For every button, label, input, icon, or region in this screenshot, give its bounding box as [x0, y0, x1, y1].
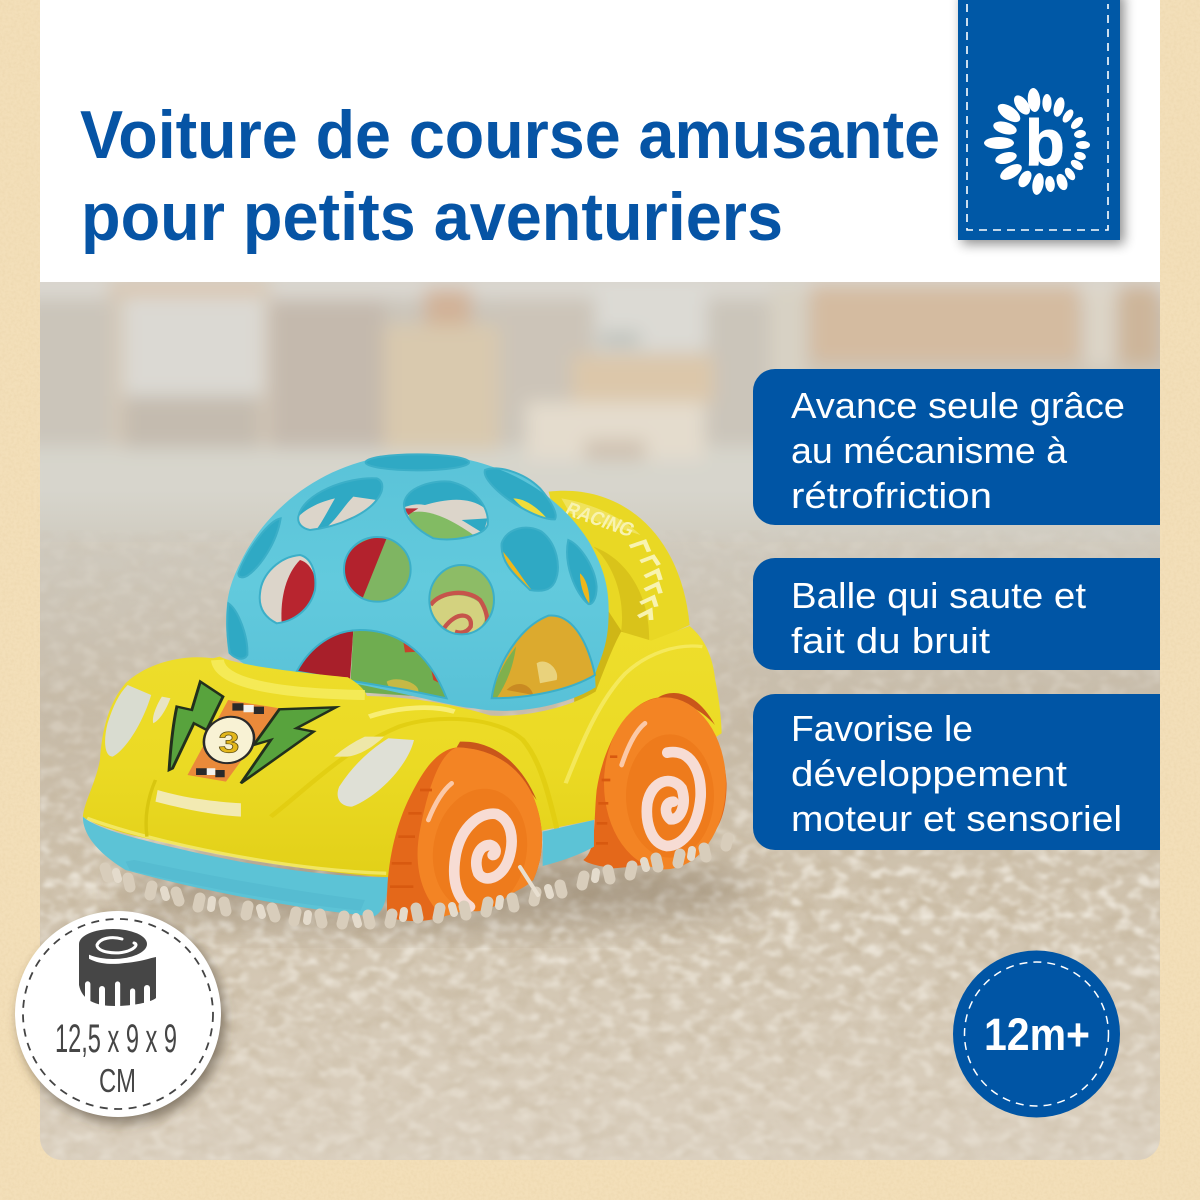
wheels [387, 693, 727, 921]
spoiler label: RACING [561, 498, 639, 541]
side skirt [543, 820, 594, 866]
body highlights [87, 646, 702, 873]
icon: measuring tape [79, 929, 156, 1008]
icon: logo sun [984, 88, 1090, 196]
callout: mechanism [753, 369, 1160, 525]
callout: mechanism: Avance seule grâce [791, 385, 1125, 426]
logo letter: b [1025, 106, 1065, 179]
carpet [40, 490, 1160, 1160]
white header panel [40, 0, 1160, 282]
carpet tufts [105, 838, 728, 924]
upper left hole [298, 478, 382, 529]
car body [83, 626, 722, 877]
title: pour petits aventuriers [81, 179, 783, 255]
callout: ball: fait du bruit [791, 620, 990, 661]
front wheel [387, 742, 542, 921]
blurred room background [40, 282, 1160, 534]
upper middle hole [404, 481, 485, 508]
spoiler [549, 491, 690, 707]
green bolt right [241, 707, 336, 783]
headlight left [105, 685, 151, 757]
brand tag [958, 0, 1124, 244]
toy car [83, 454, 727, 921]
middle red and green segment [344, 537, 411, 602]
callout: development: développement [791, 753, 1067, 794]
race number: 3 [218, 727, 239, 760]
callout: mechanism: rétrofriction [791, 475, 992, 516]
dimensions: 12,5 x 9 x 9 [55, 1017, 177, 1061]
title [80, 97, 940, 255]
dimensions [55, 1017, 177, 1099]
big red and green segment [297, 630, 353, 680]
badge: age: 12m+ [984, 1009, 1090, 1060]
photo panel [20, 270, 1180, 1160]
callout: ball [753, 558, 1160, 670]
orange stripe [188, 700, 279, 782]
badge: age [953, 950, 1120, 1118]
back of cage in upper holes [227, 454, 597, 659]
callout: development: moteur et sensoriel [791, 798, 1122, 839]
hood decal [169, 682, 336, 783]
blue cage [226, 454, 609, 711]
car body group [83, 626, 722, 917]
bumper [83, 817, 388, 917]
badge: size [15, 911, 225, 1123]
rattle ball [226, 454, 609, 711]
title: Voiture de course amusante [80, 97, 940, 173]
callout: development [753, 694, 1160, 850]
spoiler chevrons [630, 542, 661, 620]
callout: ball: Balle qui saute et [791, 575, 1086, 616]
swirl segment [429, 565, 494, 634]
left hole red segment [281, 560, 316, 623]
green bolt left [169, 682, 223, 770]
transparent dome [492, 615, 595, 698]
headlight right [338, 738, 414, 807]
car shadow [120, 854, 760, 926]
ball contents [227, 454, 597, 698]
callout: development: Favorise le [791, 708, 973, 749]
callout: mechanism: au mécanisme à [791, 430, 1068, 471]
checker [196, 703, 264, 777]
grille [155, 790, 241, 817]
race number [198, 713, 259, 767]
dimensions: CM [99, 1062, 136, 1099]
rear wheel [583, 693, 727, 869]
